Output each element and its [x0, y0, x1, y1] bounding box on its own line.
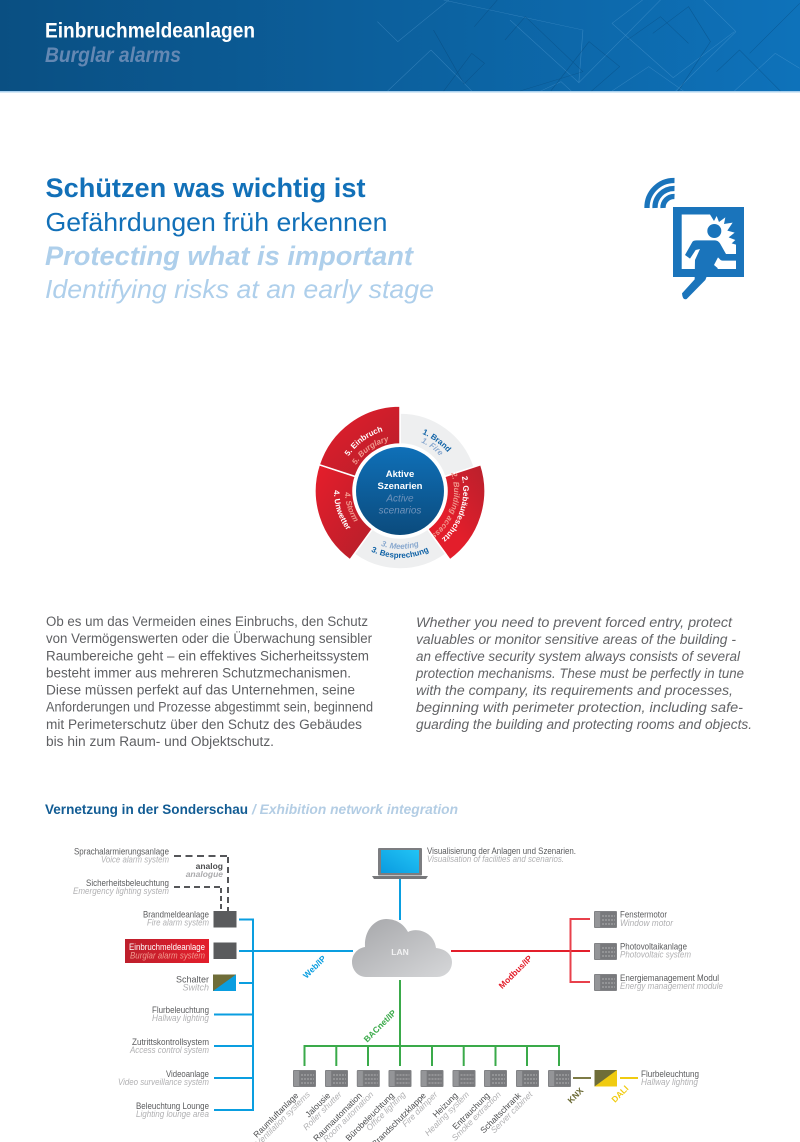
German paragraph: Raumbereiche geht – ein effektives Sicherheitssystem	[46, 648, 369, 663]
headline block: Schützen was wichtig ist	[46, 173, 366, 203]
German paragraph: von Vermögenswerten oder die Überwachung sensibler	[46, 631, 372, 646]
bottom rotated labels: Roller shutter	[301, 1089, 345, 1132]
right labels: photovoltaic	[620, 942, 691, 960]
fire alarm device box	[214, 911, 236, 928]
red highlighted label: burglar alarm: Burglar alarm system	[130, 950, 205, 960]
left labels: fire alarm: Fire alarm system	[147, 918, 209, 928]
segment 1: fire: 1. Fire	[421, 438, 442, 455]
left labels: lounge lighting: Beleuchtung Lounge	[136, 1101, 209, 1111]
header subtitle: Burglar alarms	[45, 44, 181, 67]
left labels: access control: Access control system	[129, 1045, 209, 1055]
bottom rotated labels: Fire damper	[400, 1089, 440, 1129]
green BACnet/IP bus	[304, 980, 559, 1066]
segment 3: meeting: 3. Meeting	[381, 541, 418, 549]
segment 1: fire: 1. Brand	[422, 430, 452, 452]
laptop label	[427, 846, 576, 864]
label: hallway lighting right: Hallway lighting	[641, 1077, 698, 1087]
burglar alarm device box	[214, 942, 236, 959]
right labels: photovoltaic: Photovoltaikanlage	[620, 942, 687, 952]
left labels: lounge lighting: Lighting lounge area	[136, 1109, 209, 1119]
red Modbus/IP bus	[451, 919, 590, 982]
bottom rotated labels: Raumautomation	[311, 1090, 364, 1142]
left labels: access control: Zutrittskontrollsystem	[132, 1037, 209, 1047]
bottom rotated labels: Heizung	[430, 1090, 460, 1119]
English paragraph: with the company, its requirements and processes,	[416, 683, 733, 698]
left labels: voice alarm: Voice alarm system	[101, 854, 169, 864]
right labels: photovoltaic: Photovoltaic system	[620, 950, 691, 960]
German paragraph: Ob es um das Vermeiden eines Einbruchs, den Schutz	[46, 614, 368, 629]
left labels: emergency lighting: Sicherheitsbeleuchtung	[86, 878, 169, 888]
section heading: Vernetzung in der Sonderschau	[45, 801, 248, 817]
analog dashed connections	[174, 856, 228, 911]
left labels: switch: Switch	[182, 982, 209, 992]
headline block: Gefährdungen früh erkennen	[46, 207, 388, 237]
cloud: LAN	[352, 919, 452, 977]
donut centre label: Aktive	[386, 469, 414, 480]
left labels: emergency lighting	[73, 878, 169, 896]
right devices	[594, 911, 617, 991]
section heading	[45, 801, 458, 817]
left labels: video: Video surveillance system	[118, 1077, 209, 1087]
left labels: fire alarm	[143, 910, 209, 928]
right labels: window motor	[620, 910, 674, 928]
laptop label: Visualisation of facilities and scenarios.	[427, 854, 564, 864]
donut centre label: Szenarien	[378, 481, 423, 492]
left labels: voice alarm	[74, 846, 169, 864]
German paragraph: mit Perimeterschutz über den Schutz des Gebäudes	[46, 717, 362, 732]
headline block	[45, 173, 434, 304]
left labels: video: Videoanlage	[166, 1069, 209, 1079]
cloud: LAN: LAN	[391, 947, 409, 957]
English paragraph: beginning with perimeter protection, including safe-	[416, 700, 744, 715]
right labels: window motor: Window motor	[620, 918, 674, 928]
segment 2: building access	[428, 466, 484, 559]
label: DALI: DALI	[609, 1083, 630, 1104]
English paragraph: valuables or monitor sensitive areas of the building -	[416, 632, 737, 647]
bottom rotated labels: Jalousie	[303, 1090, 332, 1119]
bottom rotated labels: Schaltschrank	[478, 1090, 523, 1135]
bottom rotated labels: Bürobeleuchtung	[343, 1090, 396, 1142]
right labels: energy management: Energiemanagement Modul	[620, 973, 719, 983]
segment 5: burglary: 5. Burglary	[352, 437, 388, 464]
bottom devices	[293, 1070, 571, 1087]
blue connection laptop to cloud	[399, 879, 401, 920]
segment 5: burglary	[320, 406, 400, 477]
DALI line	[620, 1077, 638, 1079]
English paragraph: Whether you need to prevent forced entry, protect	[416, 615, 733, 630]
bottom rotated labels	[251, 1089, 535, 1142]
German paragraph: besteht immer aus mehreren Schutzmechanismen.	[46, 665, 351, 680]
segment 2: building access: 2. Gebäudeschutz	[442, 476, 469, 542]
network diagram	[73, 846, 723, 1142]
bottom rotated labels: Server cabinet	[489, 1089, 535, 1135]
segment 3: meeting: 3. Besprechung	[372, 546, 429, 560]
headline block: Protecting what is important	[45, 241, 414, 271]
switch icon	[213, 974, 236, 991]
German paragraph	[46, 614, 373, 749]
label: analog: analogue	[186, 869, 223, 879]
segment 4: storm: 4. Unwetter	[334, 490, 350, 530]
left labels: emergency lighting: Emergency lighting system	[73, 886, 169, 896]
English paragraph: an effective security system always consists of several	[416, 649, 741, 664]
laptop label: Visualisierung der Anlagen und Szenarien.	[427, 846, 576, 856]
label: KNX: KNX	[565, 1085, 585, 1105]
left labels: lounge lighting	[136, 1101, 209, 1119]
KNX/DALI gateway icon	[594, 1070, 617, 1086]
left labels: switch: Schalter	[176, 974, 209, 984]
header banner	[0, 0, 800, 92]
donut centre label: scenarios	[379, 506, 421, 516]
segment 2: building access: 2. Building access	[432, 472, 460, 538]
left labels: hallway lighting: Hallway lighting	[152, 1013, 209, 1023]
red highlighted label: burglar alarm: Einbruchmeldeanlage	[129, 942, 205, 952]
label: analog	[186, 861, 223, 879]
donut chart: active scenarios	[316, 406, 484, 568]
icon: wifi signal and running person with alarm burst	[647, 180, 744, 299]
bottom rotated labels: Raumluftanlage	[251, 1090, 301, 1140]
bottom rotated labels: Office lighting	[364, 1089, 408, 1133]
right labels: energy management	[620, 973, 723, 991]
left labels: switch	[176, 974, 209, 992]
label: hallway lighting right	[641, 1069, 699, 1087]
left labels: video	[118, 1069, 209, 1087]
English paragraph: protection mechanisms. These must be perfectly in tune	[415, 666, 744, 681]
left labels: fire alarm: Brandmeldeanlage	[143, 910, 209, 920]
segment 3: meeting	[356, 529, 447, 568]
section heading: / Exhibition network integration	[251, 801, 458, 817]
label: Modbus/IP: Modbus/IP	[497, 953, 534, 991]
blue Web/IP bus	[214, 918, 353, 1111]
bottom rotated labels: Smoke extraction	[449, 1089, 503, 1142]
KNX line	[573, 1077, 591, 1079]
bottom rotated labels: Heating system	[423, 1089, 471, 1138]
donut centre label: Active	[385, 494, 414, 504]
segment 5: burglary: 5. Einbruch	[344, 426, 382, 456]
donut centre label	[356, 447, 444, 535]
segment 4: storm	[316, 466, 372, 559]
segment 1: fire	[401, 414, 473, 476]
English paragraph: guarding the building and protecting rooms and objects.	[416, 717, 752, 732]
label: analog: analog	[196, 861, 223, 871]
red highlighted label: burglar alarm	[125, 939, 209, 963]
segment 4: storm: 4. Storm	[344, 492, 358, 522]
left labels: hallway lighting: Flurbeleuchtung	[152, 1005, 209, 1015]
right labels: energy management: Energy management module	[620, 981, 723, 991]
label: hallway lighting right: Flurbeleuchtung	[641, 1069, 699, 1079]
right labels: window motor: Fenstermotor	[620, 910, 667, 920]
left labels: access control	[129, 1037, 209, 1055]
label: Web/IP: Web/IP	[301, 953, 328, 980]
German paragraph: bis hin zum Raum- und Objektschutz.	[46, 734, 274, 749]
header title: Einbruchmeldeanlagen	[45, 20, 255, 42]
label: BACnet/IP: BACnet/IP	[362, 1007, 398, 1044]
English paragraph	[415, 615, 752, 732]
German paragraph: Anforderungen und Prozesse abgestimmt sein, beginnend	[46, 700, 373, 715]
bottom rotated labels: Entrauchung	[450, 1090, 492, 1131]
left labels: voice alarm: Sprachalarmierungsanlage	[74, 846, 169, 856]
headline block: Identifying risks at an early stage	[45, 274, 434, 304]
laptop icon	[372, 848, 428, 879]
left labels: hallway lighting	[152, 1005, 209, 1023]
German paragraph: Diese müssen perfekt auf das Unternehmen, seine	[46, 683, 355, 698]
